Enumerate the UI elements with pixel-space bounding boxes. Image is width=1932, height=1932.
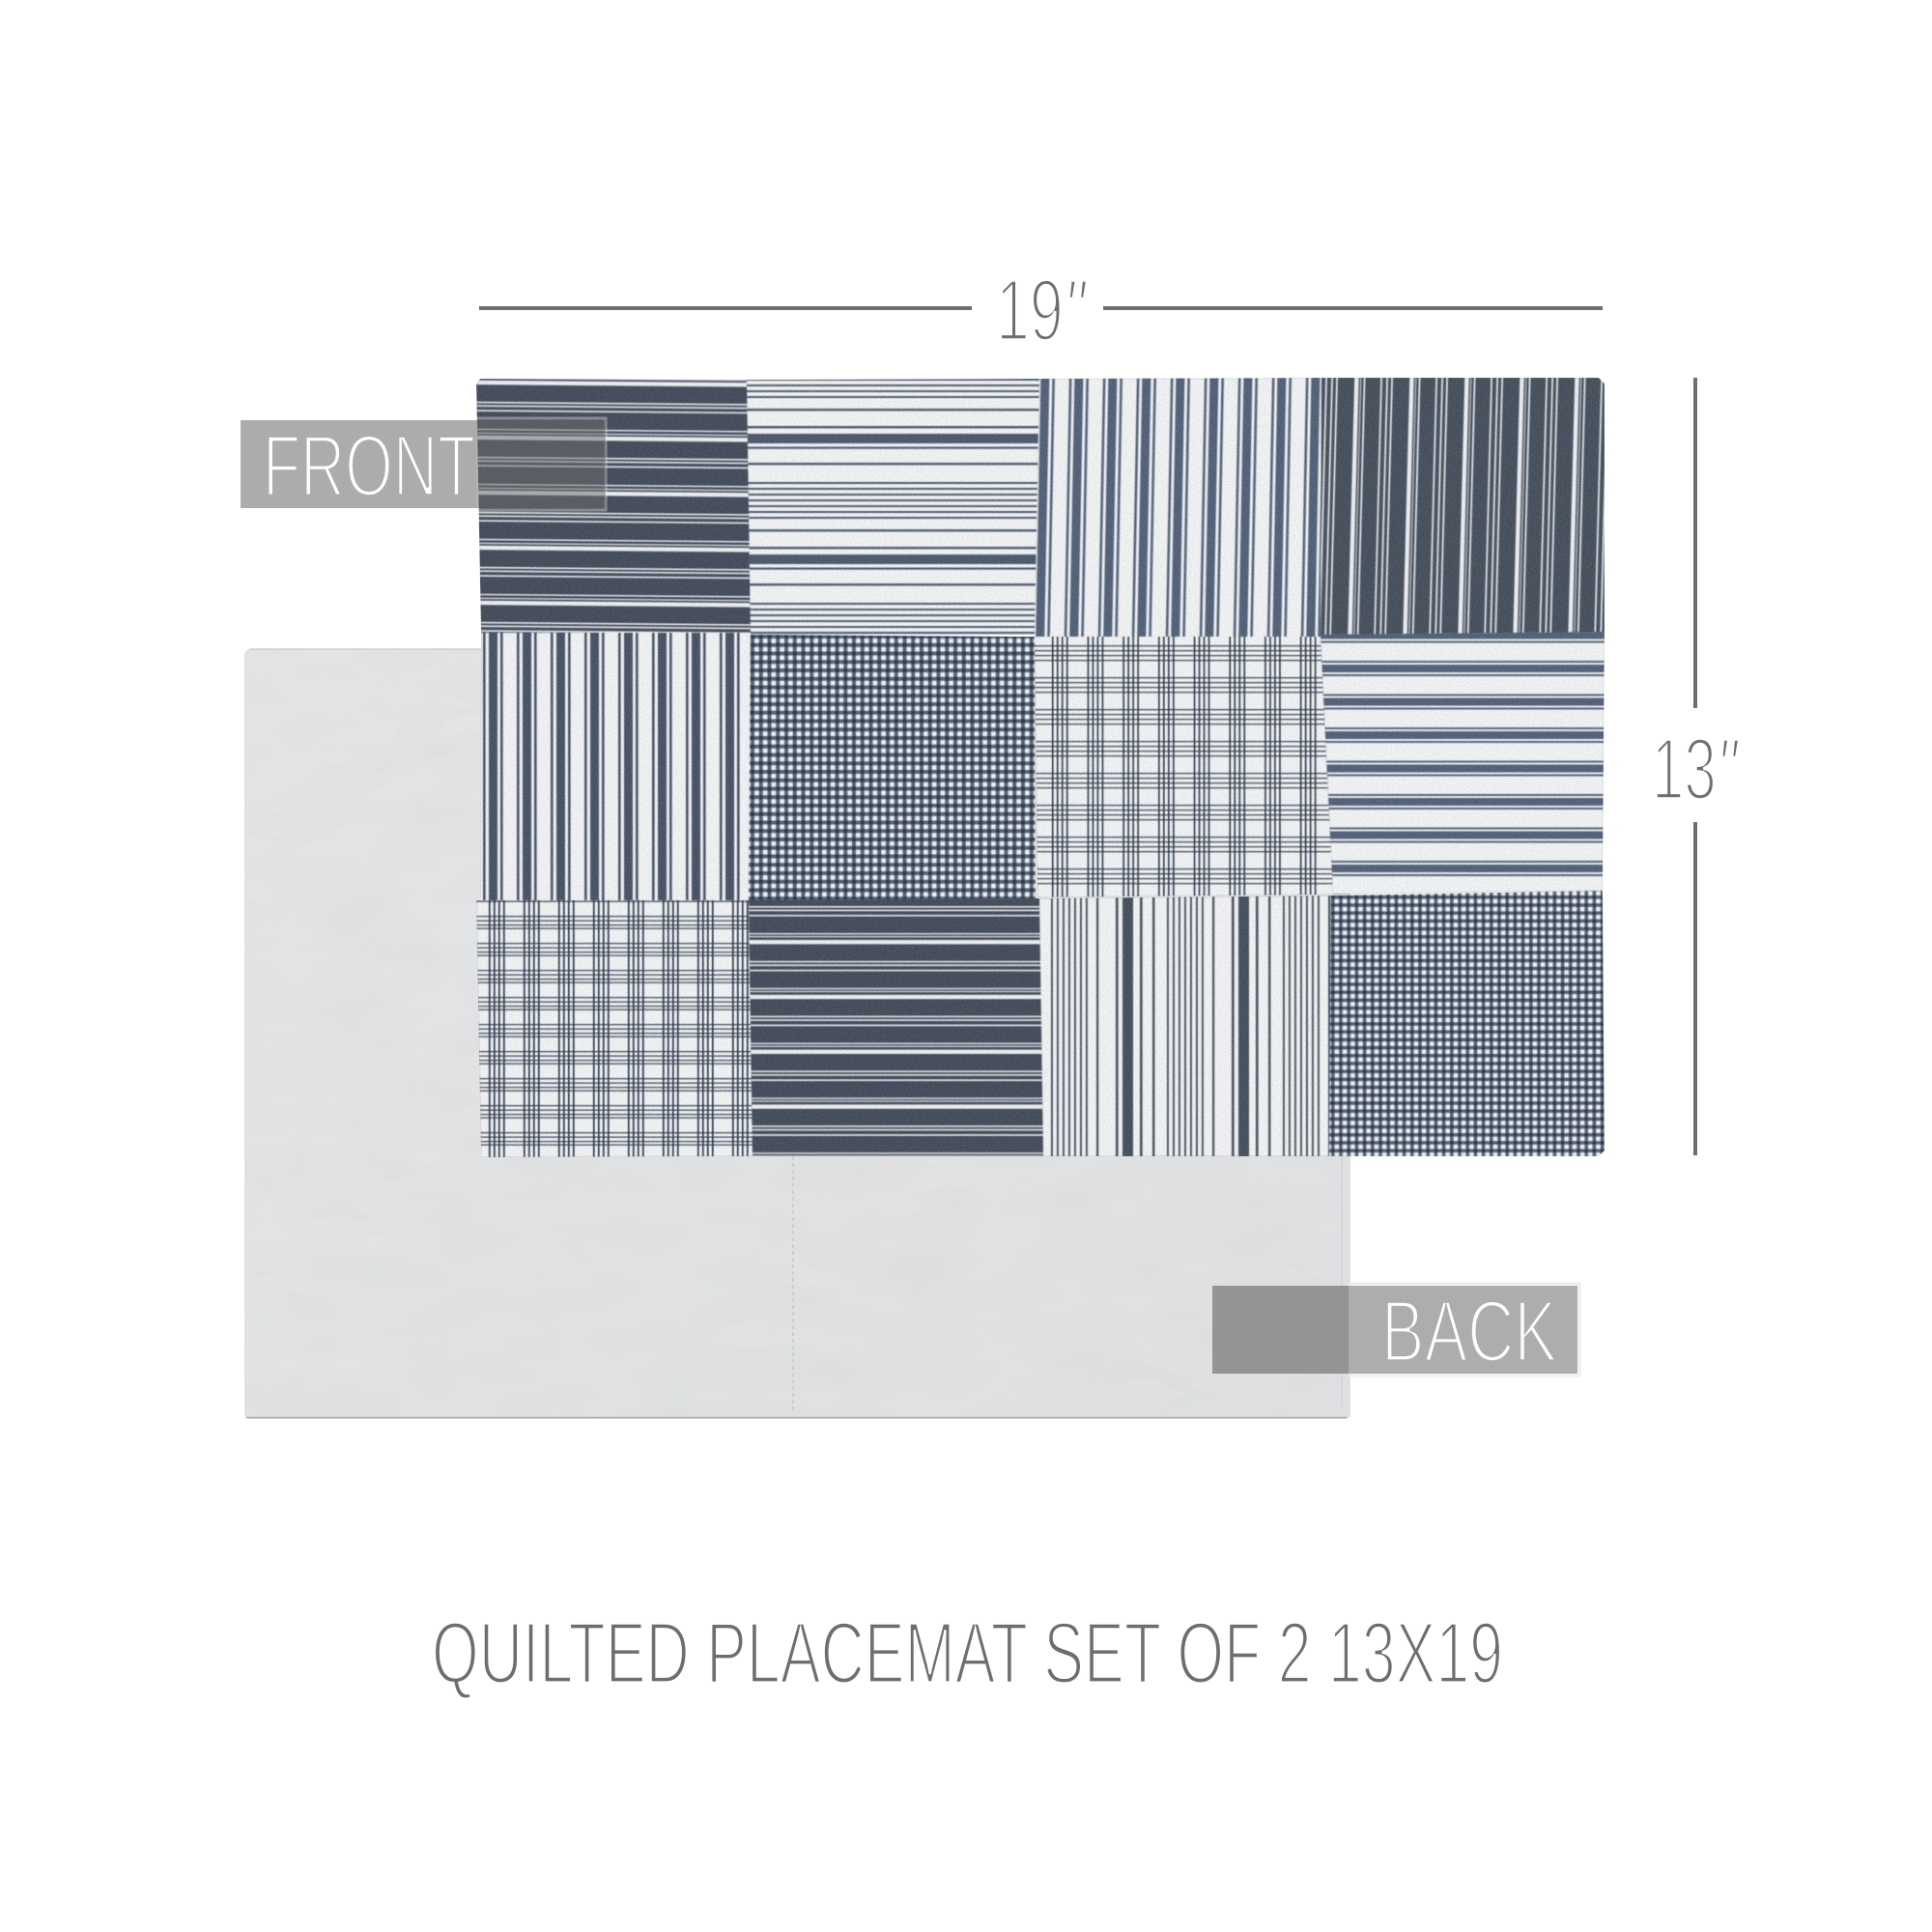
label: BACK: BACK: [1381, 1284, 1557, 1380]
panel: front of placemat patchwork: [476, 378, 1605, 1157]
patch: small gingham check: [749, 635, 1036, 900]
patch: blue vertical stripes: [1035, 378, 1321, 637]
label: BACK: [1212, 1284, 1579, 1380]
patch: thin plaid: [1035, 637, 1333, 897]
patch: dark vertical stripes: [1321, 378, 1605, 635]
panel: back of placemat: [244, 649, 1350, 1419]
patch: blue vertical stripes second row: [480, 633, 751, 900]
patch: dark horizontal stripes third row: [749, 898, 1043, 1156]
patch: fine horizontal stripes: [747, 379, 1039, 635]
title: product name: QUILTED PLACEMAT SET OF 2 13X19: [432, 1605, 1503, 1702]
label: FRONT: FRONT: [263, 418, 475, 515]
patch: gingham check corner: [1329, 891, 1605, 1156]
patch: thin plaid third row: [476, 900, 753, 1157]
patch: fine vertical stripes: [1039, 895, 1331, 1156]
dimension: height 13 inches: 13": [1652, 722, 1740, 818]
patch: blue horizontal stripes: [1321, 632, 1605, 895]
dimension: height 13 inches: [1652, 378, 1740, 1155]
dimension: width 19 inches: 19": [996, 263, 1088, 359]
dimension: width 19 inches: [479, 263, 1603, 359]
patch: dark horizontal stripes: [476, 379, 751, 633]
